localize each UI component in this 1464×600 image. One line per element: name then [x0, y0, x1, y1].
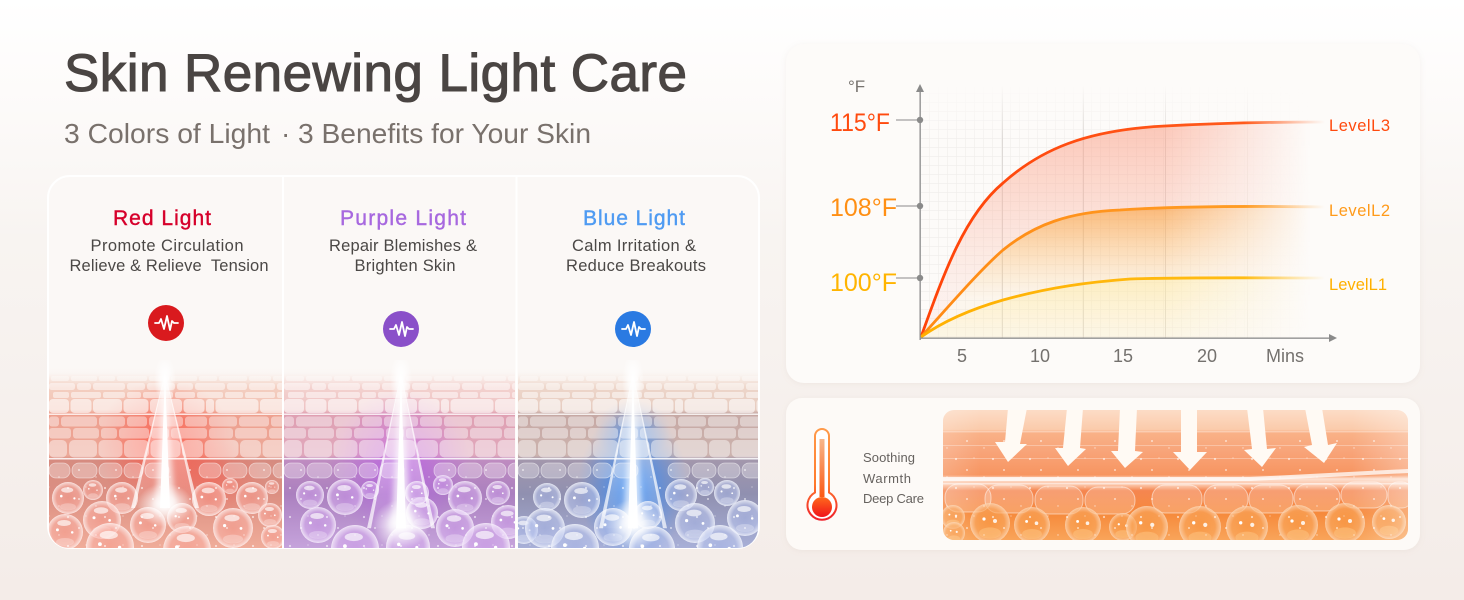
- text: purple light benefits: [329, 237, 477, 275]
- level labels: LevelL2: [1329, 202, 1390, 220]
- icon: purple pulse: [383, 311, 419, 347]
- subtitle: 3 Colors of Light: [64, 118, 270, 149]
- y labels: [830, 109, 897, 297]
- y labels: 115°F: [830, 109, 890, 137]
- text: blue light benefits: Calm Irritation &: [572, 237, 696, 255]
- column: blue light: [518, 209, 758, 548]
- x labels: [957, 346, 1304, 366]
- icon: blue pulse: [615, 311, 651, 347]
- subtitle: [64, 118, 591, 149]
- x labels: 15: [1113, 346, 1133, 366]
- text: warmth benefits: Soothing: [863, 450, 915, 465]
- text: purple light benefits: Repair Blemishes &: [329, 237, 477, 255]
- icon: thermometer: [807, 429, 837, 520]
- text: blue light benefits: Reduce Breakouts: [566, 257, 706, 275]
- line chart: [896, 84, 1337, 342]
- text: red light benefits: [70, 237, 268, 275]
- text: warmth benefits: Warmth: [863, 471, 911, 486]
- heat arrows: [995, 408, 1337, 470]
- y axis: [916, 84, 924, 340]
- tick markers: [896, 117, 923, 281]
- text: red light benefits: Relieve & Relieve Tension: [70, 257, 268, 275]
- text: blue light benefits: [566, 237, 706, 275]
- level labels: LevelL3: [1329, 117, 1390, 135]
- x labels: 5: [957, 346, 967, 366]
- curve: level 3: [921, 122, 1325, 337]
- x axis: [920, 334, 1337, 342]
- warm bubbles: [943, 503, 1406, 540]
- subtitle: ·: [281, 118, 290, 149]
- panel: temperature chart: [786, 80, 1420, 383]
- text: purple light benefits: Brighten Skin: [354, 257, 456, 275]
- unit label: °F: [848, 77, 865, 96]
- y labels: 100°F: [830, 269, 897, 297]
- curve: level 1: [921, 278, 1325, 337]
- panel: warmth: [786, 398, 1420, 550]
- skin illustration: purple: [284, 376, 515, 548]
- text: red light benefits: Promote Circulation: [90, 237, 244, 255]
- column: purple light: [284, 209, 515, 548]
- heading: purple light: Purple Light: [340, 207, 466, 230]
- title: Skin Renewing Light Care: [64, 44, 687, 103]
- subtitle: 3 Benefits for Your Skin: [298, 118, 591, 149]
- deep skin cells: [945, 482, 1412, 514]
- heading: red light: Red Light: [113, 207, 211, 230]
- level labels: [1329, 117, 1390, 294]
- y labels: 108°F: [830, 194, 897, 222]
- level labels: LevelL1: [1329, 276, 1387, 294]
- heading: blue light: Blue Light: [583, 207, 685, 230]
- x labels: 10: [1030, 346, 1050, 366]
- skin illustration: red: [49, 375, 282, 548]
- skin illustration: blue: [518, 376, 758, 548]
- skin heat illustration: [941, 408, 1412, 548]
- text: warmth benefits: Deep Care: [863, 491, 924, 506]
- text: warmth benefits: [863, 450, 924, 506]
- x labels: Mins: [1266, 346, 1304, 366]
- curve: level 2: [921, 206, 1325, 337]
- icon: red pulse: [148, 305, 184, 341]
- x labels: 20: [1197, 346, 1217, 366]
- column: red light: [49, 209, 282, 548]
- panel: three colours of light: [47, 176, 766, 574]
